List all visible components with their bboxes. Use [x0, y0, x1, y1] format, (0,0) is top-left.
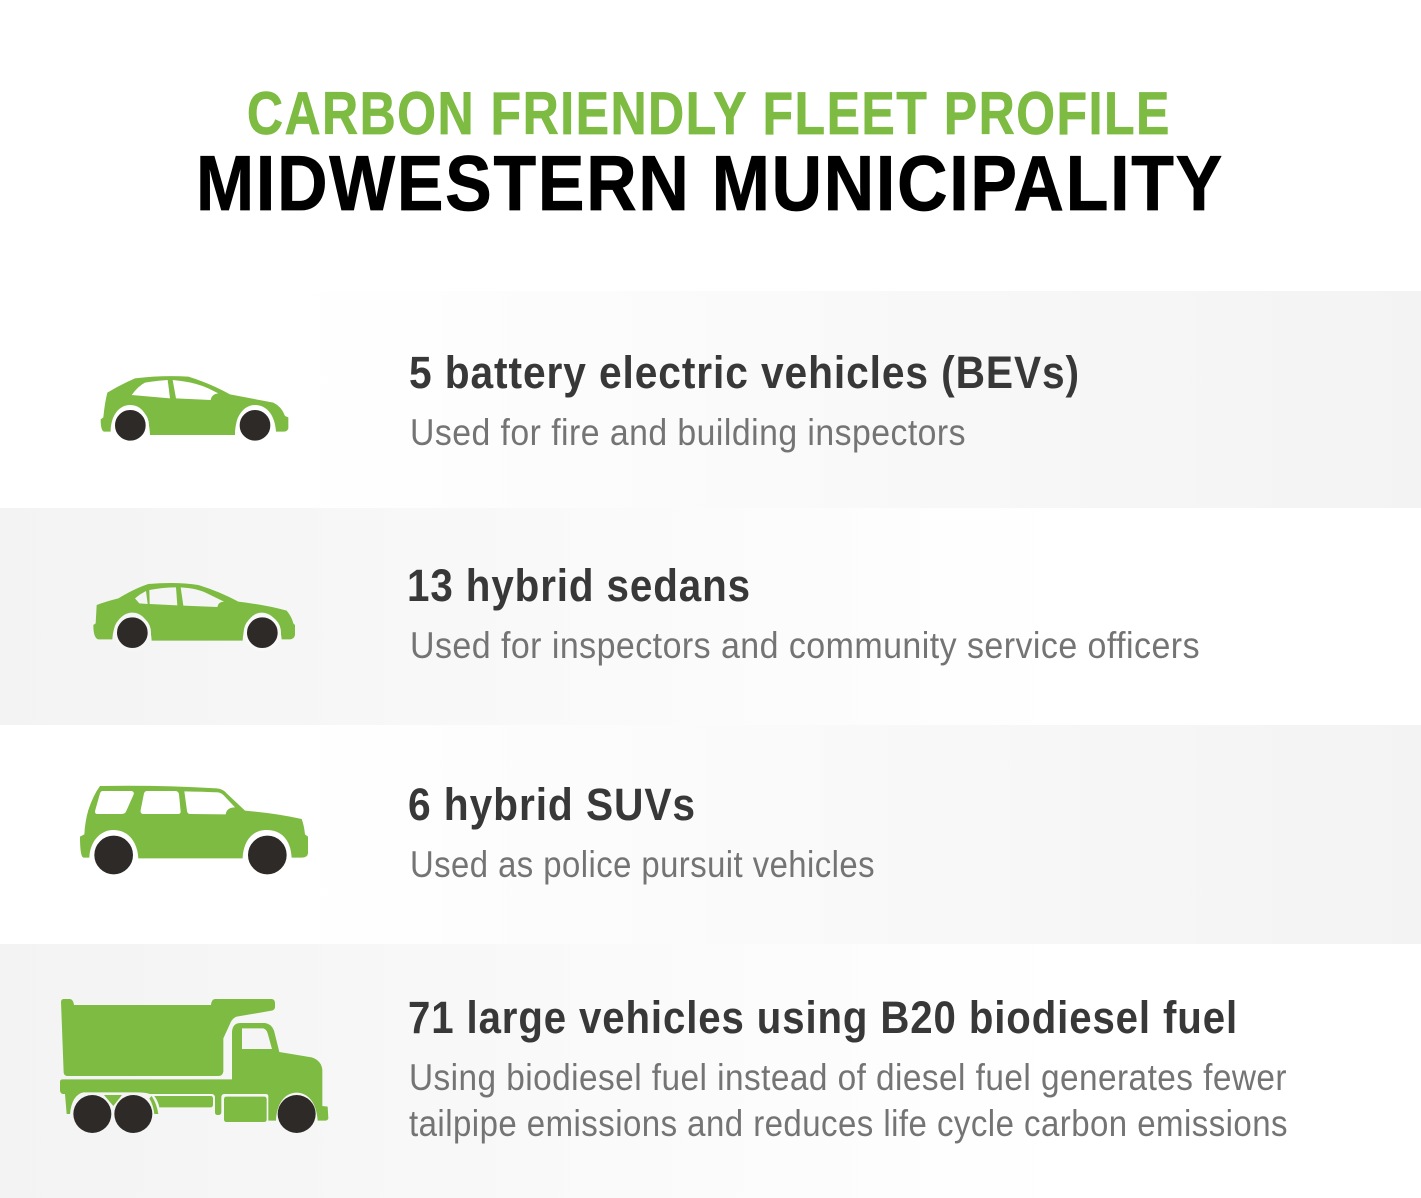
panel: large vehicles [0, 944, 1421, 1198]
title: MIDWESTERN MUNICIPALITY [196, 139, 1224, 227]
heading: 5 battery electric vehicles (BEVs) [409, 347, 1080, 398]
description: Used as police pursuit vehicles [410, 844, 875, 885]
description: tailpipe emissions and reduces life cycle carbon emissions [409, 1103, 1288, 1144]
description: Using biodiesel fuel instead of diesel fuel generates fewer [409, 1057, 1287, 1098]
description: Used for inspectors and community service officers [410, 625, 1200, 666]
icon: dump truck [60, 999, 328, 1133]
description: Used for fire and building inspectors [410, 412, 966, 453]
panel: hybrid SUVs [0, 725, 1421, 944]
title: CARBON FRIENDLY FLEET PROFILE [247, 80, 1171, 147]
panel: battery electric vehicles [0, 291, 1421, 508]
icon: sedan car [93, 583, 295, 650]
icon: SUV [80, 786, 308, 876]
heading: 6 hybrid SUVs [408, 779, 696, 830]
title [196, 80, 1224, 227]
heading: 71 large vehicles using B20 biodiesel fuel [408, 992, 1238, 1043]
heading: 13 hybrid sedans [407, 560, 751, 611]
panel: hybrid sedans [0, 508, 1421, 725]
description [409, 1057, 1288, 1144]
icon: hatchback car [101, 376, 288, 442]
